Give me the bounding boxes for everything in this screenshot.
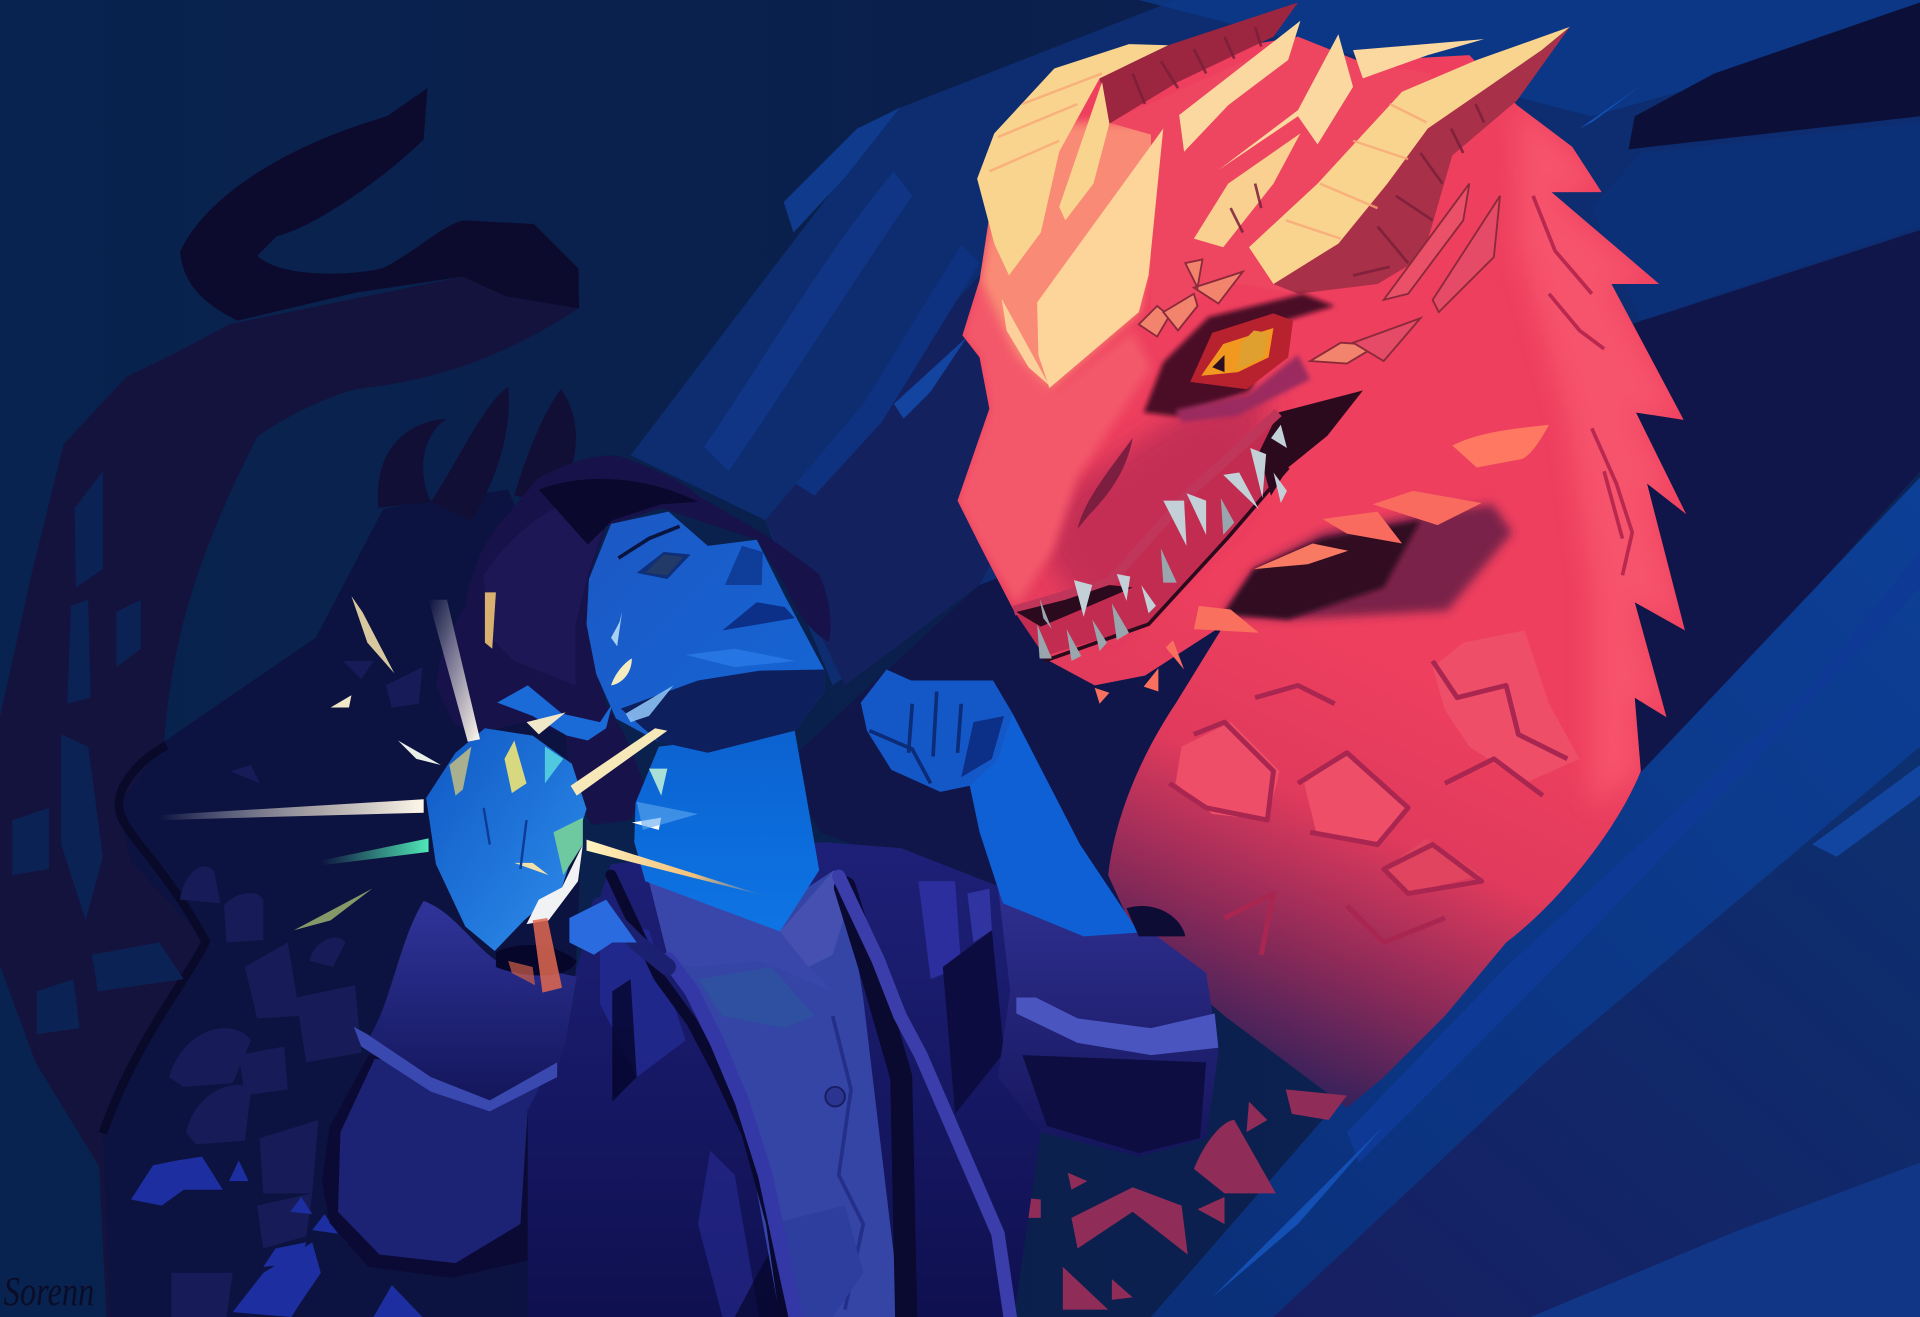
bright blue scales bottom left <box>131 1157 422 1317</box>
boy ear <box>497 685 612 741</box>
boy left hand holding crystal <box>426 728 587 993</box>
artist signature: Sorenn <box>4 1269 94 1315</box>
dark navy panel behind the dragon <box>784 230 1920 930</box>
dragon eye shadow <box>1144 294 1335 416</box>
dragon neck and head base <box>958 37 1686 1108</box>
boy neck <box>634 731 819 931</box>
dragon brow scales <box>1139 184 1500 364</box>
boy jacket body <box>528 842 1212 1317</box>
crystal light rays <box>159 592 765 930</box>
dragon soft colour shading <box>958 105 1686 808</box>
dragon horns and cream head plates <box>977 21 1570 388</box>
dragon neck scale cracks <box>1169 196 1632 955</box>
rock-like scales left <box>169 661 422 1317</box>
dragon horn dark undersides <box>1100 2 1570 294</box>
silhouette window patches <box>12 471 184 1034</box>
boy face <box>587 512 824 753</box>
lower right wing band <box>1151 477 1920 1317</box>
dragon lower scales <box>1016 1089 1347 1310</box>
boy left sleeve cuff <box>354 901 577 1111</box>
boy right sleeve <box>998 886 1218 1157</box>
dragon head pink crest between horns <box>1108 37 1433 330</box>
background wings: blue diagonal bands <box>631 0 1920 685</box>
dragon mouth and teeth <box>1014 390 1363 661</box>
dragon cheek shadow and frills <box>1095 425 1549 704</box>
boy right fist and arm <box>861 670 1185 936</box>
dragon horn ridges <box>1133 27 1484 275</box>
jacket trims <box>600 875 1010 1317</box>
boy hair <box>436 456 831 825</box>
dark silhouette: dragon behind boy <box>0 88 588 1317</box>
boy lower left sleeve <box>322 1055 557 1278</box>
boy shirt <box>649 870 901 1317</box>
bright fur near hand <box>569 900 637 955</box>
dragon nostril <box>1078 438 1133 529</box>
dragon eye <box>1190 313 1293 389</box>
